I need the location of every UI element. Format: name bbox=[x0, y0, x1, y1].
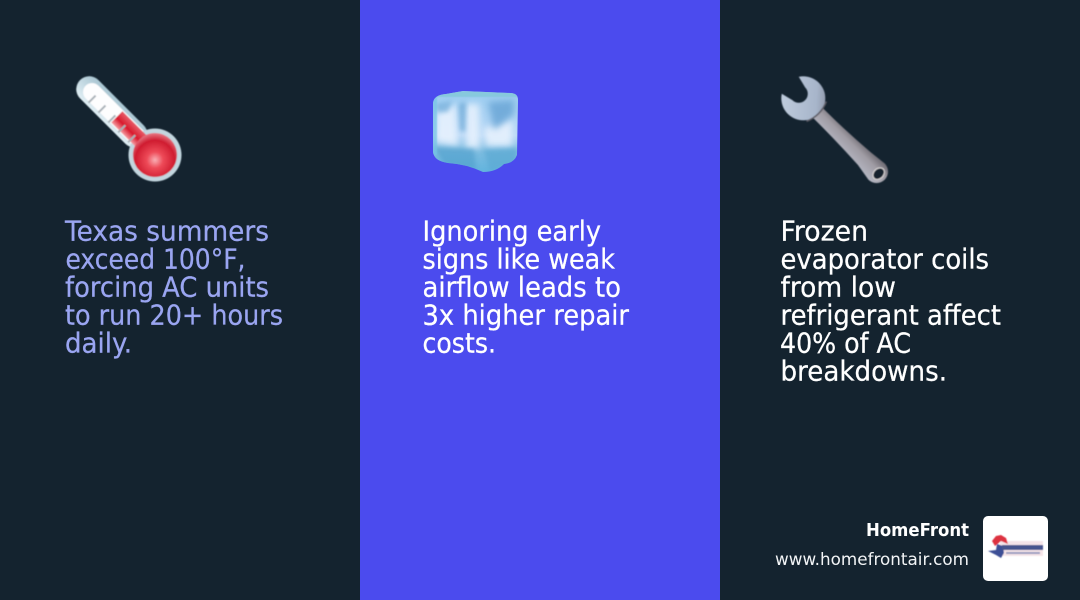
icon: wrench bbox=[775, 70, 900, 195]
text block: right column: evaporator coils bbox=[780, 244, 989, 276]
text block: left column: exceed 100°F, bbox=[66, 244, 246, 276]
panel: left background bbox=[0, 0, 360, 600]
panel: middle background bbox=[360, 0, 720, 600]
text block: right column: breakdowns. bbox=[780, 356, 947, 388]
text block: left column: forcing AC units bbox=[65, 272, 269, 304]
text block: middle column: 3x higher repair bbox=[422, 300, 630, 332]
text block: right column bbox=[780, 216, 1001, 388]
text block: middle column: Ignoring early bbox=[422, 216, 601, 248]
text block: left column: to run 20+ hours bbox=[65, 300, 283, 332]
text block: right column: Frozen bbox=[780, 216, 868, 248]
text block: middle column: airflow leads to bbox=[422, 272, 621, 304]
text block: middle column: signs like weak bbox=[422, 244, 615, 276]
text block: middle column: costs. bbox=[422, 328, 496, 360]
text block: right column: 40% of AC bbox=[780, 328, 911, 360]
text block: right column: refrigerant affect bbox=[780, 300, 1001, 332]
website url: www.homefrontair.com bbox=[775, 550, 969, 570]
text block: left column: daily. bbox=[65, 328, 132, 360]
text block: middle column bbox=[422, 216, 630, 360]
panel: right background bbox=[720, 0, 1080, 600]
icon: thermometer bbox=[61, 61, 192, 192]
icon: ice cube bbox=[432, 91, 518, 172]
text block: left column: Texas summers bbox=[64, 216, 269, 248]
text block: right column: from low bbox=[780, 272, 896, 304]
brand name: HomeFront bbox=[866, 521, 969, 541]
logo card bbox=[983, 516, 1048, 581]
text block: left column bbox=[64, 216, 283, 360]
